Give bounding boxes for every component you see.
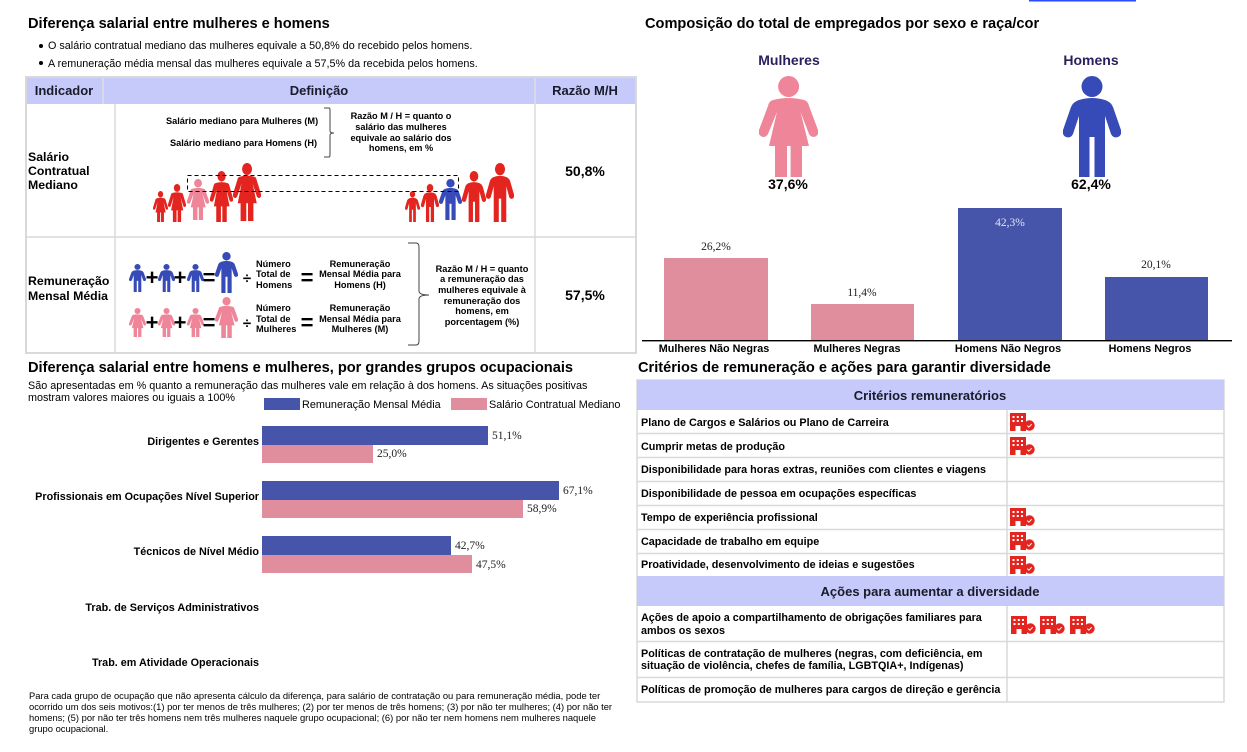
equation: men: + <box>146 265 158 290</box>
equation: women: + <box>146 310 158 335</box>
footnote: Para cada grupo de ocupação que não apresenta cálculo da diferença, para salário de contratação ou para remuneração média, pode ter <box>29 690 600 701</box>
row: equipe <box>641 532 1035 550</box>
row: contratação: Políticas de contratação de mulheres (negras, com deficiência, em <box>641 648 982 660</box>
text: chart description <box>28 380 588 404</box>
equation: women: = <box>203 310 215 335</box>
table header <box>27 78 635 104</box>
header: ações: Ações para aumentar a diversidade <box>821 584 1039 599</box>
figures: women row <box>153 163 261 222</box>
definition: average ratio: homens, em <box>455 306 509 316</box>
text: chart description: São apresentadas em % quanto a remuneração das mulheres vale em relação à dos homens. As situações positivas <box>28 380 588 392</box>
brace: median <box>324 108 334 157</box>
row label: salário contratual mediano: Contratual <box>28 164 90 178</box>
equation: women: Mulheres (M) <box>332 324 388 334</box>
definition: median ratio: equivale ao salário dos <box>350 133 452 143</box>
group: profissionais <box>35 481 593 518</box>
pictogram: men <box>1063 52 1121 192</box>
legend: Remuneração Mensal Média <box>302 399 442 411</box>
bullet list: key findings: A remuneração média mensal das mulheres equivale a 57,5% da recebida pelos homens. <box>48 58 478 70</box>
bar chart: composition by sex and race: 20,1% <box>1141 259 1171 271</box>
definition: average ratio: remuneração dos <box>444 296 520 306</box>
group: dirigentes <box>147 426 522 463</box>
group: serviços administrativos: Trab. de Serviços Administrativos <box>85 602 259 614</box>
row: contratação <box>641 648 982 672</box>
row label: salário contratual mediano: Mediano <box>28 178 78 192</box>
row: equipe: Capacidade de trabalho em equipe <box>641 536 819 548</box>
bar chart: composition by sex and race: 26,2% <box>701 241 731 253</box>
definition: median ratio: salário das mulheres <box>355 122 447 132</box>
equation: women: Total de <box>256 314 291 324</box>
row: apoio familiar <box>641 612 1095 637</box>
group: técnicos <box>134 536 506 573</box>
group: técnicos: 47,5% <box>476 559 506 571</box>
brace: average pay <box>408 243 429 345</box>
footnote: homens; (5) por não ter três homens nem três mulheres naquele grupo ocupacional; (6) por não ter nem homens nem mulheres naquele <box>29 712 596 723</box>
definition: median labels <box>166 116 318 148</box>
group: profissionais: Profissionais em Ocupações Nível Superior <box>35 491 260 503</box>
equation: women: Remuneração <box>330 303 391 313</box>
header: ações <box>637 576 1224 606</box>
bar chart: composition by sex and race: 42,3% <box>995 217 1025 229</box>
equation: men: Mensal Média para <box>319 269 402 279</box>
equation: men: ÷ <box>243 270 251 287</box>
figures: men row <box>405 163 514 222</box>
definition: average ratio: a remuneração das <box>440 274 524 284</box>
bullet list: key findings <box>39 40 478 70</box>
row: experiência: Tempo de experiência profissional <box>641 512 818 524</box>
group: profissionais: 58,9% <box>527 503 557 515</box>
definition: average ratio <box>436 264 529 327</box>
equation: women: Mulheres <box>256 324 296 334</box>
row: metas <box>641 437 1035 455</box>
row: plano de cargos <box>641 413 1035 431</box>
row: apoio familiar: ambos os sexos <box>641 625 725 637</box>
row: experiência <box>641 508 1035 526</box>
row: horas extras: Disponibilidade para horas extras, reuniões com clientes e viagens <box>641 464 986 476</box>
row: ocupações específicas: Disponibilidade de pessoa em ocupações específicas <box>641 488 916 500</box>
footnote <box>29 690 612 734</box>
bar chart: composition by sex and race: Homens Não Negros <box>955 343 1061 355</box>
value: 57,5%: 57,5% <box>565 287 605 303</box>
definition: average ratio: mulheres equivale à <box>438 285 527 295</box>
header: critérios remuneratórios: Critérios remuneratórios <box>854 388 1006 403</box>
bullet list: key findings: O salário contratual mediano das mulheres equivale a 50,8% do recebido pelos homens. <box>48 40 472 52</box>
row label: remuneração mensal média <box>28 274 110 303</box>
bar chart: composition by sex and race: 11,4% <box>847 287 877 299</box>
equation: men: Número <box>256 259 291 269</box>
equation: men: + <box>174 265 186 290</box>
bar chart: composition by sex and race: Mulheres Negras <box>813 343 901 355</box>
definition: median labels: Salário mediano para Homens (H) <box>170 138 317 148</box>
definition: median labels: Salário mediano para Mulheres (M) <box>166 116 318 126</box>
table header: Indicador <box>35 83 93 98</box>
heading: criteria: Critérios de remuneração e ações para garantir diversidade <box>638 360 1051 376</box>
group: dirigentes: 51,1% <box>492 430 522 442</box>
panel: criteria table <box>637 380 1224 702</box>
row: metas: Cumprir metas de produção <box>641 441 785 453</box>
equation: women: Número <box>256 303 291 313</box>
table header: Definição <box>290 83 348 98</box>
equation: men: = <box>203 265 215 290</box>
header: critérios remuneratórios <box>637 380 1224 410</box>
row: apoio familiar: Ações de apoio a compartilhamento de obrigações familiares para <box>641 612 983 624</box>
row label: salário contratual mediano <box>28 150 90 192</box>
row: promoção: Políticas de promoção de mulheres para cargos de direção e gerência <box>641 684 1001 696</box>
equation: men <box>129 252 402 293</box>
row label: remuneração mensal média: Remuneração <box>28 274 110 288</box>
bar chart: composition by sex and race: Mulheres Não Negras <box>659 343 769 355</box>
group: dirigentes: Dirigentes e Gerentes <box>147 436 259 448</box>
legend: Salário Contratual Mediano <box>489 399 620 411</box>
definition: median ratio <box>350 111 452 153</box>
equation: men: Total de <box>256 269 291 279</box>
definition: median ratio: homens, em % <box>369 143 433 153</box>
group: profissionais: 67,1% <box>563 485 593 497</box>
table header: Razão M/H <box>552 83 618 98</box>
definition: average ratio: Razão M / H = quanto <box>436 264 529 274</box>
footnote: grupo ocupacional. <box>29 723 108 734</box>
pictogram: men: Homens <box>1063 52 1119 68</box>
equation: women: = <box>301 310 313 335</box>
definition: median ratio: Razão M / H = quanto o <box>351 111 452 121</box>
pictogram: men: 62,4% <box>1071 176 1111 192</box>
panel: indicator table <box>26 77 636 353</box>
median highlight box <box>188 176 458 192</box>
equation: men: Remuneração <box>330 259 391 269</box>
group: técnicos: 42,7% <box>455 540 485 552</box>
row: proatividade <box>641 556 1035 574</box>
equation: men: Homens <box>256 280 292 290</box>
footnote: ocorrido um dos seis motivos:(1) por ter menos de três mulheres; (2) por ter menos de três homens; (3) por não ter mulheres; (4) por não ter <box>29 701 612 712</box>
heading: composition: Composição do total de empregados por sexo e raça/cor <box>645 16 1039 32</box>
pictogram: women: Mulheres <box>758 52 820 68</box>
link underline fragment <box>1029 0 1136 2</box>
group: técnicos: Técnicos de Nível Médio <box>134 546 259 558</box>
group: dirigentes: 25,0% <box>377 448 407 460</box>
bar chart: composition by sex and race <box>642 208 1232 355</box>
group: atividade operacionais: Trab. em Atividade Operacionais <box>92 657 259 669</box>
definition: average ratio: porcentagem (%) <box>445 317 519 327</box>
legend <box>264 398 620 411</box>
equation: women: ÷ <box>243 315 251 332</box>
pictogram: women <box>758 52 820 192</box>
equation: women <box>129 297 402 338</box>
bar chart: composition by sex and race: Homens Negros <box>1109 343 1191 355</box>
equation: men: = <box>301 265 313 290</box>
heading: occupational groups: Diferença salarial entre homens e mulheres, por grandes grupos ocupacionais <box>28 360 573 376</box>
row label: salário contratual mediano: Salário <box>28 150 69 164</box>
equation: men: Homens (H) <box>334 280 386 290</box>
row: plano de cargos: Plano de Cargos e Salários ou Plano de Carreira <box>641 417 890 429</box>
equation: women: + <box>174 310 186 335</box>
equation: women: Mensal Média para <box>319 314 402 324</box>
bar chart: pay ratio by occupation <box>35 426 593 669</box>
value: 50,8%: 50,8% <box>565 163 605 179</box>
row label: remuneração mensal média: Mensal Média <box>28 289 108 303</box>
heading: salary gap: Diferença salarial entre mulheres e homens <box>28 16 330 32</box>
row: proatividade: Proatividade, desenvolvimento de ideias e sugestões <box>641 559 915 571</box>
text: chart description: mostram valores maiores ou iguais a 100% <box>28 392 235 404</box>
row: contratação: situação de violência, chefes de família, LGBTQIA+, Indígenas) <box>641 660 964 672</box>
pictogram: women: 37,6% <box>768 176 808 192</box>
